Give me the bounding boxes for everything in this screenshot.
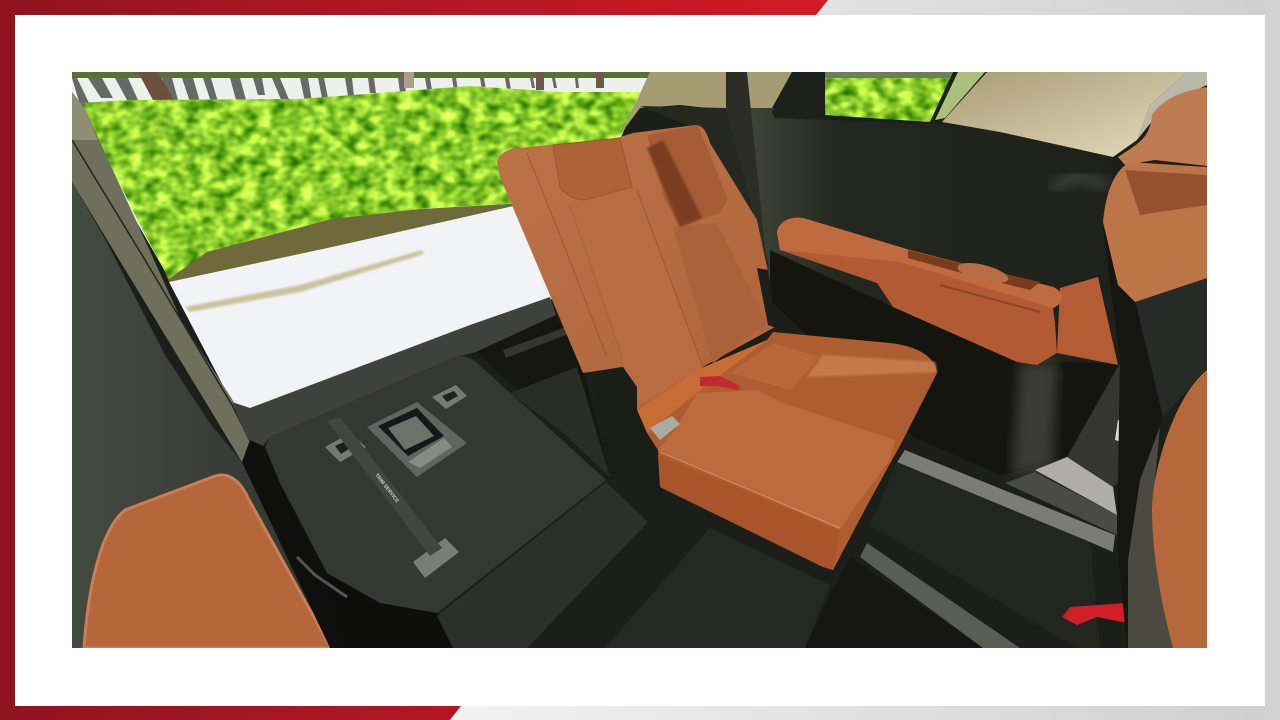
roof liner beige xyxy=(942,72,1187,157)
folded seat panel, dark carpet xyxy=(242,356,830,648)
outside view through the door opening xyxy=(72,72,652,410)
anchor bottom xyxy=(413,538,459,578)
lower door, shadowed xyxy=(770,250,1120,475)
red tag xyxy=(1062,603,1127,625)
road xyxy=(169,205,548,407)
stitch lines xyxy=(527,153,607,357)
seat cushion, orange leather xyxy=(637,332,937,570)
hedge foliage xyxy=(80,86,640,279)
fence stripes xyxy=(72,78,579,103)
cushion front face xyxy=(658,455,840,570)
cushion front top xyxy=(658,390,895,530)
seat anchor left xyxy=(325,438,366,462)
red belt buckle xyxy=(700,376,740,390)
front seat right xyxy=(1103,87,1207,648)
headrest left xyxy=(553,138,632,200)
left door armrest, orange leather xyxy=(84,475,331,648)
rear side window xyxy=(772,72,987,124)
doorway opening xyxy=(1067,364,1120,487)
right inner door panel, dark xyxy=(750,108,886,302)
seat base bracket, black xyxy=(606,367,660,487)
belt receiver strap xyxy=(757,268,776,328)
rear quarter trim beige xyxy=(622,72,726,132)
seat back perforated insert xyxy=(673,223,767,363)
tree trunks xyxy=(138,72,174,100)
left door pillar and panel xyxy=(72,92,314,648)
door armrest and trim, orange xyxy=(777,218,1118,365)
boot sill trim xyxy=(232,297,556,447)
seat back centre panel xyxy=(684,367,703,378)
seat anchor top right xyxy=(432,385,467,409)
seat belt xyxy=(726,72,767,267)
headrest right xyxy=(647,125,728,227)
release handle recess xyxy=(367,402,467,477)
pull strap xyxy=(327,417,442,556)
floor mat right xyxy=(805,450,1127,648)
photo: third-row seat in vehicle interior xyxy=(72,72,1207,648)
seat back, orange leather xyxy=(497,125,775,410)
strap label: TRIM SERVICE xyxy=(373,473,400,505)
